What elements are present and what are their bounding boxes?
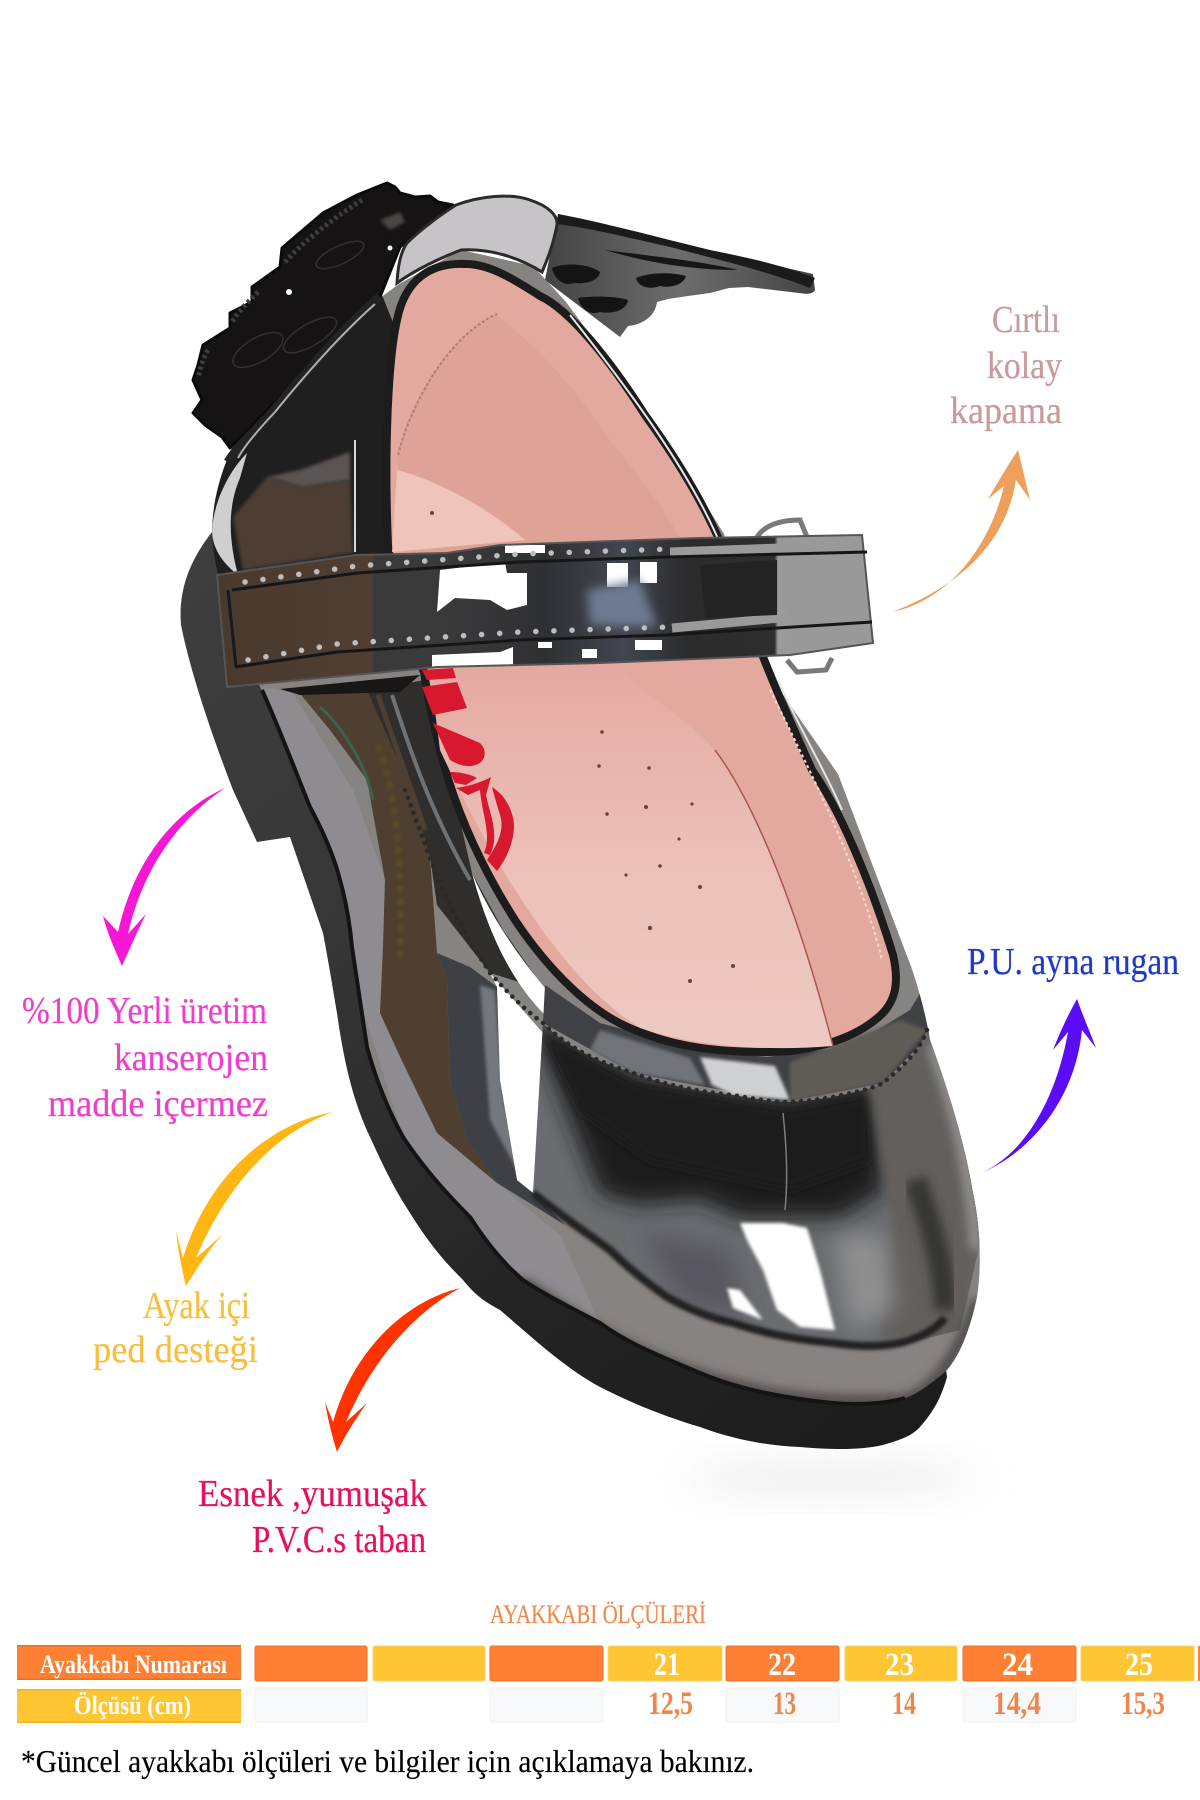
shoe illustration xyxy=(181,183,1000,1496)
strap beads xyxy=(245,549,670,660)
row header: size in cm xyxy=(17,1689,241,1723)
label: sole: Esnek ,yumuşak xyxy=(198,1473,427,1515)
side green line xyxy=(320,707,373,800)
rim side band xyxy=(367,680,545,990)
size value cells xyxy=(255,1686,1165,1722)
shoe number cells: 21 xyxy=(654,1647,680,1683)
label: insole: Ayak içi xyxy=(143,1285,250,1327)
shoe number cells: 23 xyxy=(885,1647,914,1683)
toe mirror highlights xyxy=(740,1223,835,1330)
label: production xyxy=(22,990,268,1125)
collar velcro patch xyxy=(397,196,557,283)
label: closure: Cırtlı xyxy=(992,299,1060,341)
sole inner line xyxy=(262,690,905,1404)
hook strap xyxy=(217,533,875,695)
silver band shading xyxy=(523,1282,977,1401)
toe arch dark line xyxy=(533,1193,945,1346)
table title: AYAKKABI ÖLÇÜLERİ xyxy=(490,1600,706,1629)
opening rim xyxy=(386,264,896,1052)
sole and heel xyxy=(181,532,947,1449)
label: production: madde içermez xyxy=(48,1083,268,1125)
insole seam xyxy=(715,750,833,1046)
lining pad seam xyxy=(398,314,497,455)
right wing of bow xyxy=(545,214,815,337)
label: sole: P.V.C.s taban xyxy=(252,1519,426,1561)
row header: size in cm: Ölçüsü (cm) xyxy=(74,1691,191,1720)
toe lower mottled reflection xyxy=(648,1232,742,1316)
strap stitching xyxy=(232,552,867,590)
strap underside tab xyxy=(280,675,420,695)
side wall stitch xyxy=(770,690,882,960)
label: insole: ped desteği xyxy=(93,1329,258,1371)
shoe number cells: 22 xyxy=(768,1647,796,1683)
vamp white highlight xyxy=(491,974,542,1194)
toe crease xyxy=(783,1113,787,1210)
strap grey highlight lines xyxy=(670,548,780,628)
lining heel pad xyxy=(395,316,705,600)
blue-grey vamp side xyxy=(437,953,565,1225)
label: closure xyxy=(950,299,1062,432)
label: insole xyxy=(93,1285,258,1371)
shoe opening and lining xyxy=(386,264,896,1052)
row header: shoe number: Ayakkabı Numarası xyxy=(40,1650,227,1679)
heel brown reflection xyxy=(233,477,353,570)
arrow: material purple xyxy=(974,999,1096,1176)
size value cells: 15,3 xyxy=(1121,1686,1165,1722)
size value cells: 13 xyxy=(773,1686,796,1722)
size table xyxy=(17,1600,1200,1723)
patent upper body xyxy=(212,250,980,1404)
bow tab ridge xyxy=(228,297,380,462)
arrow: production magenta xyxy=(103,788,225,966)
collar stripes xyxy=(354,440,356,552)
row header: shoe number xyxy=(17,1645,241,1680)
size value cells: 14,4 xyxy=(993,1686,1041,1722)
toe right bronze xyxy=(868,1030,990,1340)
olive reflection xyxy=(378,745,401,960)
heel left highlight xyxy=(212,453,247,575)
label: closure: kapama xyxy=(950,390,1062,432)
shoe number cells: 25 xyxy=(1125,1647,1153,1683)
rim right highlight xyxy=(570,315,722,548)
strap left stitch xyxy=(228,590,236,667)
heel quarter dark xyxy=(212,296,392,574)
label: closure: kolay xyxy=(987,345,1062,387)
strap blue reflection xyxy=(587,580,657,627)
insole perforations xyxy=(430,511,735,983)
strap outline xyxy=(217,535,873,687)
upper reflections xyxy=(205,290,1000,1401)
footnote: *Güncel ayakkabı ölçüleri ve bilgiler için açıklamaya bakınız. xyxy=(21,1743,754,1779)
vamp bead stitching xyxy=(405,790,927,1102)
arrow: closure orange xyxy=(892,450,1030,612)
lower silver panel xyxy=(263,687,600,1323)
buckle ring xyxy=(757,520,832,672)
arrow: sole red xyxy=(325,1288,460,1452)
logo red marks xyxy=(422,668,514,871)
left wing of bow xyxy=(193,183,453,448)
toe panel xyxy=(533,1024,980,1343)
arrow: insole yellow xyxy=(176,1112,333,1286)
toe dark area xyxy=(530,1020,885,1218)
strap end grey xyxy=(852,536,872,644)
size value cells: 14 xyxy=(892,1686,916,1722)
size value cells: 12,5 xyxy=(648,1686,693,1722)
rear insole xyxy=(392,470,525,552)
floor shadow xyxy=(680,1460,980,1496)
band between rim and stitching xyxy=(543,985,930,1102)
lower insole xyxy=(430,668,833,1048)
label: sole xyxy=(198,1473,427,1561)
strap dark end shading xyxy=(700,560,777,618)
rim white highlight xyxy=(472,873,545,1014)
label: production: %100 Yerli üretim xyxy=(22,990,267,1032)
side brown reflection xyxy=(297,690,497,1183)
label: production: kanserojen xyxy=(114,1037,268,1079)
strap mirror patches xyxy=(432,545,662,670)
shoe number cells: 24 xyxy=(1002,1647,1033,1683)
shoe number cells xyxy=(255,1646,1200,1683)
